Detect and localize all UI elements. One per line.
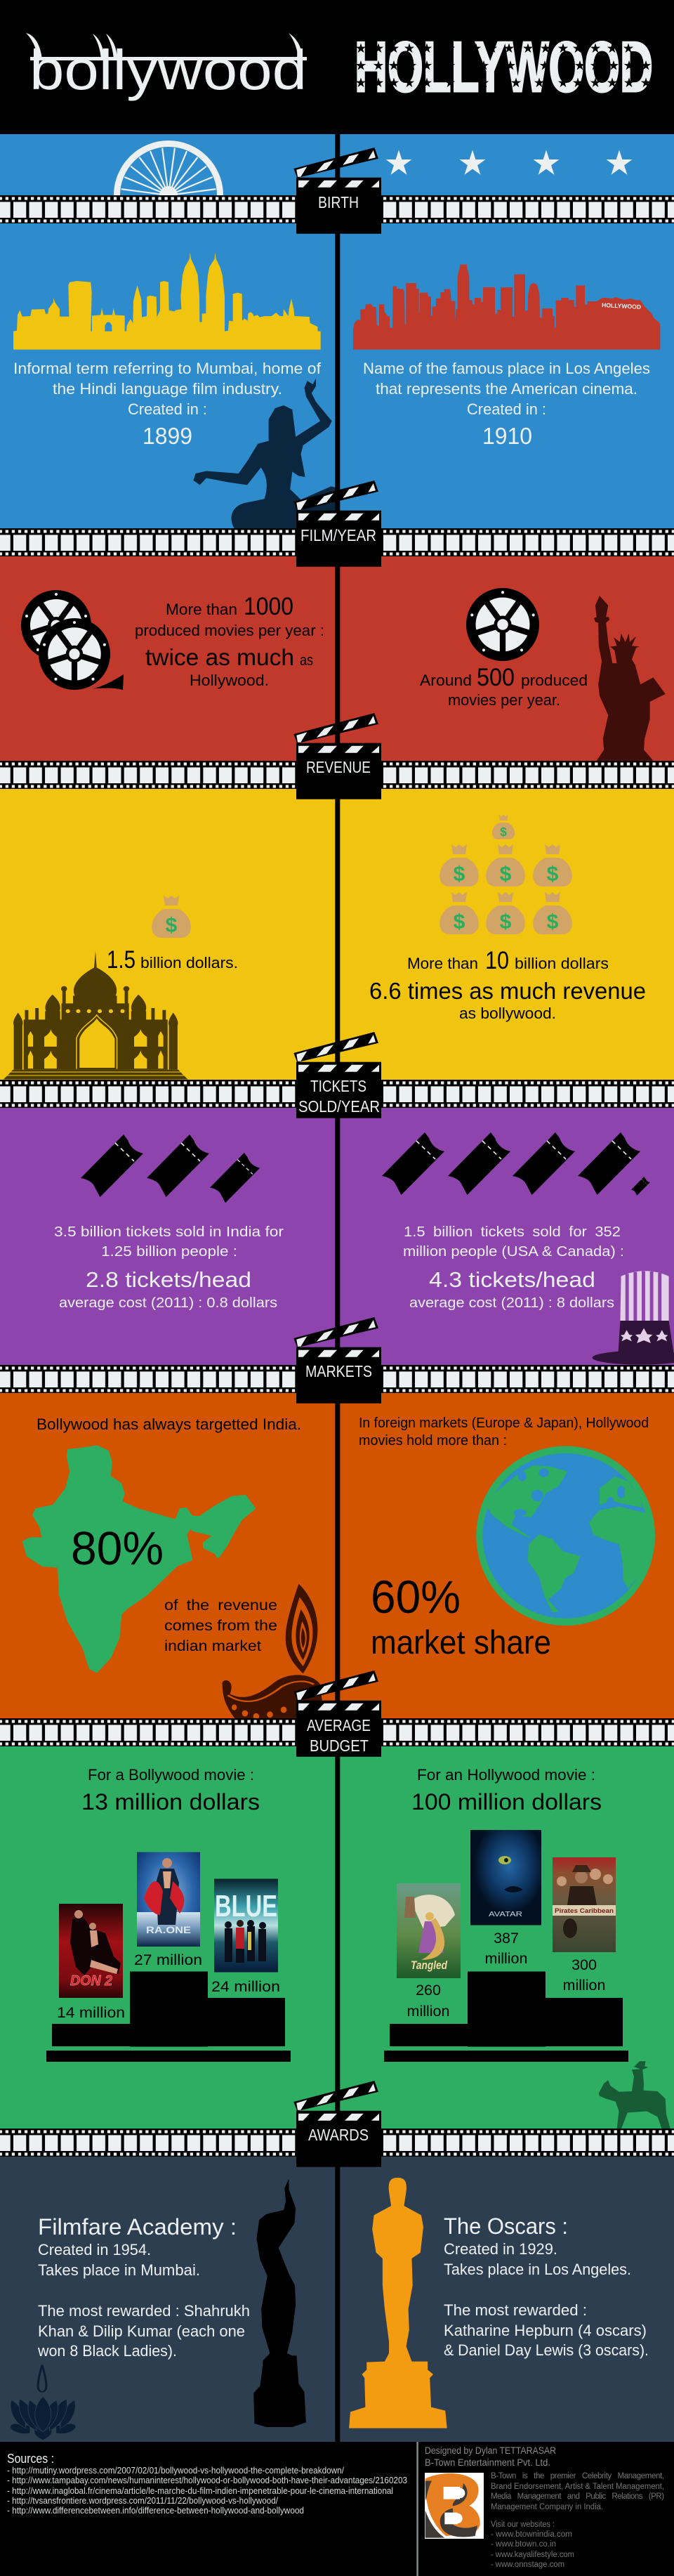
label: 27 million: 27 million [134,1951,202,1968]
label: 300 million [563,1956,605,1994]
icon: money bag: $ [166,914,178,937]
icon: lotus [10,2365,76,2440]
film strip: awards [0,2129,674,2157]
text: sources [7,2452,407,2516]
text: bollywood definition: Informal term referring to Mumbai, home of [13,360,322,377]
icon: money bags stack: $ [547,863,559,886]
text: hollywood definition: Name of the famous place in Los Angeles [363,360,650,377]
text: b-town description: Media Management and Public Relations (PR) [491,2492,664,2501]
icon: ashoka chakra wheel [117,143,220,195]
text: bollywood film count: as [300,651,313,669]
text: revenue share: indian market [164,1638,261,1654]
text: bollywood definition: the Hindi language film industry. [53,380,282,398]
text: hollywood budget [411,1766,602,1815]
icon: money bags stack [440,815,572,934]
text: filmfare academy: Takes place in Mumbai. [38,2261,200,2279]
text: b-town description: Management Company in India. [491,2503,603,2511]
icon: oscar statue [349,2178,447,2428]
text: hollywood film count [420,664,588,709]
clapperboard: average budget [293,1671,381,1757]
stat: 80 percent: 80% [71,1522,164,1575]
text: bollywood definition [13,360,322,449]
poster: avatar [470,1830,541,1925]
podium: bollywood [46,1971,291,2062]
label: 260 million [407,1982,449,2020]
panel: markets [0,1379,674,1732]
icon: film reel [466,588,539,661]
clapperboard: tickets sold per year [293,1032,381,1118]
panel: film per year [0,542,674,775]
text: hollywood revenue: billion dollars [515,955,609,972]
text: hollywood market: In foreign markets (Europe & Japan), Hollywood [359,1415,649,1431]
text: filmfare academy: Filmfare Academy : [38,2214,237,2240]
text: hollywood market [359,1415,649,1449]
text: sources: - http://www.tampabay.com/news/humaninterest/hollywood-or-bollywood-both-have-their-advantages/2160203 [7,2476,407,2485]
poster: don 2 [59,1904,123,1998]
film strip: budget [0,1718,674,1746]
text: websites: - www.btownindia.com [491,2530,572,2539]
icon: money bags stack: $ [500,910,512,934]
film strip: markets [0,1365,674,1393]
icon: bollywood tickets [81,1135,260,1203]
text: websites: - www.btown.co.in [491,2540,556,2549]
clapperboard: tickets sold per year: SOLD/YEAR [298,1097,380,1116]
text: sources: - http://mutiny.wordpress.com/2007/02/01/bollywood-vs-hollywood-the-complete-breakdown/ [7,2466,344,2476]
clapperboard: film per year [293,480,381,567]
label: 387 million [485,1930,527,1967]
text: bollywood budget: 13 million dollars [81,1789,260,1815]
text: hollywood film count: Around [420,672,472,689]
icon: filmfare black lady statue [253,2179,306,2427]
silhouette: cowboy on horse [599,2061,670,2129]
podium: hollywood [384,1971,628,2062]
poster: ra.one [137,1852,200,1947]
text: bollywood tickets: 1.25 billion people : [101,1243,237,1260]
clapperboard: revenue: REVENUE [306,758,371,776]
label: 300 million: million [563,1977,605,1994]
stat: 60 percent market share: market share [371,1623,551,1661]
footer panel [0,2442,674,2576]
text: credits: B-Town Entertainment Pvt. Ltd. [425,2457,550,2468]
text: b-town description: B-Town is the premier Celebrity Management, [491,2472,664,2480]
text: sources: Sources : [7,2452,54,2466]
icon: american stars [385,150,633,175]
text: bollywood film count: 1000 [244,593,293,620]
panel: birth [0,134,674,542]
film strip: film per year [0,528,674,556]
text: the oscars: & Daniel Day Lewis (3 oscars). [444,2341,649,2359]
clapperboard: awards: AWARDS [308,2126,369,2144]
text: hollywood budget: 100 million dollars [411,1789,602,1815]
poster: tangled [397,1883,461,1978]
film strip: birth [0,195,674,223]
panel: revenue [0,775,674,1094]
panel: tickets sold per year [0,1094,674,1379]
text: websites [491,2521,574,2569]
text: bollywood tickets: 2.8 tickets/head [86,1267,251,1292]
logo: b-town [425,2473,484,2539]
los angeles skyline with hollywood sign: HOLLYWOOD [602,301,641,310]
text: filmfare academy [37,2214,250,2360]
text: websites: Visit our websites : [491,2521,555,2529]
label: 387 million: 387 [494,1930,519,1947]
clapperboard: birth [293,148,381,234]
text: the oscars: The most rewarded : [444,2301,587,2319]
text: b-town description [491,2472,664,2511]
header panel [0,0,674,134]
text: bollywood tickets: 3.5 billion tickets sold in India for [54,1224,284,1240]
clapperboard: tickets sold per year: TICKETS [310,1077,366,1095]
text: sources: - http://www.differencebetween.info/difference-between-hollywood-and-bollywood [7,2506,304,2516]
text: bollywood definition: Created in : [128,400,207,418]
poster: blue [214,1878,278,1973]
clapperboard: average budget: AVERAGE [307,1716,371,1734]
text: hollywood film count: movies per year. [448,691,560,709]
text: revenue share: of the revenue [164,1597,277,1614]
text: bollywood revenue [107,946,238,974]
text: the oscars: Katharine Hepburn (4 oscars) [444,2322,647,2339]
clapperboard: film per year: FILM/YEAR [300,526,376,544]
text: hollywood definition: Created in : [467,400,546,418]
text: filmfare academy: Created in 1954. [38,2241,151,2258]
clapperboard: markets: MARKETS [305,1362,372,1380]
text: websites: - www.onnstage.com [491,2561,564,2569]
center divider [335,134,340,2442]
text: the oscars [444,2214,649,2359]
text: bollywood revenue: billion dollars. [140,954,238,972]
icon: money bags stack: $ [454,910,465,934]
label: 14 million: 14 million [57,2004,125,2021]
poster: pirates of the caribbean: Pirates Caribbean [555,1907,614,1914]
text: sources: - http://tvsansfrontiere.wordpress.com/2011/11/22/bollywood-vs-hollywood/ [7,2496,278,2506]
text: hollywood tickets: average cost (2011) : 8 dollars [409,1295,614,1311]
icon: money bags stack: $ [500,825,507,839]
poster: pirates of the caribbean [553,1857,616,1952]
text: bollywood budget [81,1766,260,1815]
text: bollywood film count: produced movies per year : [135,622,324,639]
poster: tangled: Tangled [411,1959,447,1972]
text: bollywood market: Bollywood has always targetted India. [37,1416,301,1433]
clapperboard: birth: BIRTH [318,193,359,211]
text: hollywood revenue: More than [407,955,478,972]
text: bollywood definition: 1899 [143,423,192,449]
text: hollywood revenue: as bollywood. [459,1005,556,1022]
text: sources: - http://www.inaglobal.fr/cinema/article/le-marche-du-film-indien-impenetrable-pour-le-cinema-international [7,2486,393,2496]
text: filmfare academy: The most rewarded : Shahrukh [38,2302,250,2320]
title: Bollywood: bollywood [29,39,307,101]
text: hollywood market: movies hold more than : [359,1432,507,1449]
icon: diya lamp [223,1584,322,1720]
icon: hollywood tickets [382,1132,650,1196]
clapperboard: revenue [293,713,381,799]
text: the oscars: Takes place in Los Angeles. [444,2261,631,2278]
text: hollywood film count: 500 [477,664,515,691]
label: 387 million: million [485,1950,527,1967]
icon: money bags stack: $ [500,863,512,886]
icon: uncle sam hat [593,1271,674,1365]
footer separator [416,2442,418,2576]
text: the oscars: Created in 1929. [444,2240,557,2258]
text: credits [425,2445,556,2468]
icon: money bags stack: $ [547,910,559,934]
poster: ra.one: RA.ONE [146,1924,191,1935]
silhouette: taj mahal [4,951,188,1079]
text: the oscars: The Oscars : [444,2214,568,2239]
text: hollywood definition: 1910 [482,423,532,449]
text: bollywood film count: More than [166,601,237,618]
text: credits: Designed by Dylan TETTARASAR [425,2445,556,2456]
panel: awards [0,2143,674,2442]
text: websites: - www.kayalifestyle.com [491,2551,574,2559]
stat: 60 percent market share: 60% [371,1571,461,1623]
text: hollywood definition: that represents the American cinema. [376,380,637,398]
clapperboard: markets [293,1317,381,1404]
silhouette: statue of liberty [594,596,666,761]
text: bollywood tickets: average cost (2011) : 0.8 dollars [59,1295,277,1311]
text: hollywood tickets: million people (USA & Canada) : [403,1243,624,1260]
text: filmfare academy: Khan & Dilip Kumar (each one [38,2322,245,2340]
icon: money bag [152,896,191,938]
text: bollywood tickets [54,1224,284,1311]
text: b-town description: Brand Endorsement, Artist & Talent Management, [491,2483,664,2491]
panel: average budget [0,1732,674,2143]
label: 300 million: 300 [571,1956,597,1973]
poster: blue: BLUE [215,1889,277,1923]
los angeles skyline with hollywood sign [353,265,660,350]
film strip: revenue [0,761,674,789]
text: filmfare academy: won 8 Black Ladies). [37,2342,177,2360]
icon: money bags stack: $ [454,863,465,886]
text: revenue share [164,1597,277,1654]
text: bollywood revenue: 1.5 [107,946,136,974]
text: hollywood revenue: 10 [485,947,509,974]
text: hollywood definition [363,360,650,449]
text: hollywood tickets [403,1224,624,1311]
text: hollywood budget: For an Hollywood movie : [417,1766,595,1784]
clapperboard: awards [293,2081,381,2167]
mumbai skyline [13,252,321,350]
text: bollywood film count: twice as much [145,644,294,670]
text: hollywood tickets: 1.5 billion tickets sold for 352 [404,1224,621,1240]
icon: globe [476,1446,656,1626]
text: hollywood film count: produced [521,672,588,689]
clapperboard: average budget: BUDGET [310,1737,369,1755]
text: bollywood film count: Hollywood. [190,672,269,689]
label: 260 million: 260 [416,1982,441,1999]
film strip: tickets [0,1080,674,1108]
text: revenue share: comes from the [164,1618,277,1634]
text: hollywood revenue: 6.6 times as much revenue [369,978,646,1004]
map: india [24,1446,254,1672]
stat: 60 percent market share [371,1571,551,1661]
poster: avatar: AVATAR [489,1911,522,1918]
label: 24 million: 24 million [211,1978,280,1995]
text: bollywood budget: For a Bollywood movie : [88,1766,254,1784]
label: 260 million: million [407,2003,449,2020]
text: hollywood tickets: 4.3 tickets/head [429,1267,595,1292]
silhouette: dancer [193,379,336,528]
text: hollywood revenue [369,947,646,1022]
poster: don 2: DON 2 [70,1973,112,1989]
icon: two film reels [21,590,124,690]
text: bollywood film count [135,593,324,689]
